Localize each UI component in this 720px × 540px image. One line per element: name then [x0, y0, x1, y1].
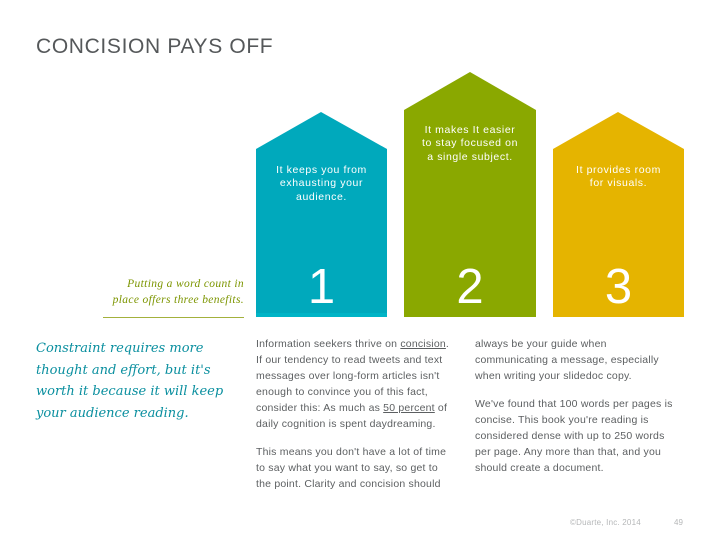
body column 1 [256, 338, 449, 490]
pull quote: worth it because it will keep [36, 384, 223, 399]
body column 2: per page. Any more than that, and you [475, 446, 661, 458]
body column 2 [475, 338, 673, 474]
intro callout: Putting a word count in [127, 278, 244, 290]
intro callout: place offers three benefits. [113, 294, 244, 306]
body column 1: the point. Clarity and concision should [256, 478, 441, 490]
body column 1: messages over long-form articles isn't [256, 370, 440, 382]
body column 1: If our tendency to read tweets and text [256, 354, 442, 366]
house 1 caption: audience. [296, 191, 347, 203]
body column 1: enough to convince you of this fact, [256, 386, 428, 398]
house 3 caption: It provides room [576, 164, 661, 176]
house 1 number: 1 [308, 260, 335, 314]
pull quote [36, 341, 223, 421]
body column 2: communicating a message, especially [475, 354, 659, 366]
house 2: green [404, 72, 536, 317]
body column 2: concise. This book you're reading is [475, 414, 649, 426]
house 3: yellow [553, 112, 684, 317]
house 2 number: 2 [456, 260, 484, 314]
body column 1: consider this: As much as 50 percent of [256, 402, 447, 414]
house 2 caption [422, 124, 518, 163]
footer page number: 49 [674, 518, 683, 527]
house 2 caption: to stay focused on [422, 137, 518, 149]
title: CONCISION PAYS OFF [36, 35, 273, 58]
body column 2: should create a document. [475, 462, 604, 474]
body column 2: when writing your slidedoc copy. We've found that 100 words per pages is [475, 370, 673, 410]
house 1: teal [256, 112, 387, 317]
house 1 caption: It keeps you from [276, 164, 367, 176]
pull quote: Constraint requires more [36, 341, 203, 356]
pull quote: your audience reading. [36, 406, 189, 421]
body column 2: considered dense with up to 250 words [475, 430, 665, 442]
body column 1: Information seekers thrive on concision. [256, 338, 449, 350]
house 3 caption: for visuals. [590, 177, 647, 189]
pull quote: thought and effort, but it's [36, 363, 211, 378]
house 1 caption: exhausting your [280, 177, 363, 189]
house 2 caption: It makes It easier [425, 124, 515, 136]
house 3 caption [576, 164, 661, 189]
body column 2: always be your guide when [475, 338, 607, 350]
intro callout [103, 276, 244, 318]
house 3 number: 3 [605, 260, 632, 314]
body column 1: daily cognition is spent daydreaming. This means you don't have a lot of time [256, 418, 446, 458]
body column 1: to say what you want to say, so get to [256, 462, 438, 474]
house 1 caption [276, 164, 367, 203]
house 2 caption: a single subject. [427, 151, 513, 163]
footer copyright: ©Duarte, Inc. 2014 [570, 518, 641, 527]
